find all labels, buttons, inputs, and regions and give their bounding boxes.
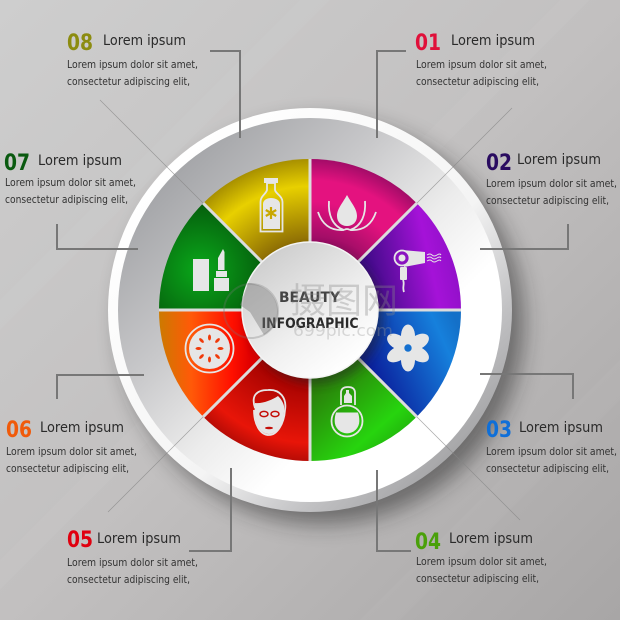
callout 02 <box>486 151 617 207</box>
watermark <box>224 273 398 340</box>
center circle <box>242 242 384 384</box>
callout 05: Lorem ipsum <box>97 531 181 547</box>
donut segments <box>159 159 461 461</box>
watermark: 摄图网 <box>290 273 398 324</box>
callout 08 <box>67 31 198 88</box>
diagonal guide lines <box>100 100 520 520</box>
callout 01: Lorem ipsum dolor sit amet, <box>416 58 547 71</box>
callout 07: 07 <box>4 151 30 176</box>
segment 03 blue <box>310 310 461 417</box>
icon: bottle <box>260 178 282 232</box>
connector 01 <box>377 51 406 138</box>
icon: face mask <box>254 390 285 435</box>
segment 08 yellow <box>203 159 310 310</box>
wheel base <box>108 108 524 524</box>
connector 04 <box>377 470 411 551</box>
callout 06: 06 <box>6 418 32 443</box>
callout 06 <box>6 418 137 475</box>
title: INFOGRAPHIC <box>262 316 358 332</box>
callout 07: Lorem ipsum dolor sit amet, <box>5 176 136 189</box>
callout 07: consectetur adipiscing elit, <box>5 193 128 206</box>
callout 08: 08 <box>67 31 93 56</box>
callout 04 <box>415 530 547 585</box>
callout 05: 05 <box>67 528 93 553</box>
segment 05 red <box>203 310 310 461</box>
segment 07 dark green <box>159 203 310 310</box>
icon: flower <box>384 324 432 372</box>
callout 03: Lorem ipsum <box>519 420 603 436</box>
callout 04: 04 <box>415 530 441 555</box>
callout 02: Lorem ipsum <box>517 152 601 168</box>
callout 04: Lorem ipsum dolor sit amet, <box>416 555 547 568</box>
callout 01: consectetur adipiscing elit, <box>416 75 539 88</box>
callout 01: Lorem ipsum <box>451 33 535 49</box>
title: BEAUTY <box>279 290 340 306</box>
connector 06 <box>57 375 144 399</box>
connector 03 <box>480 374 573 399</box>
callout 08: Lorem ipsum <box>103 33 186 49</box>
callout 08: consectetur adipiscing elit, <box>67 75 190 88</box>
callout 01: 01 <box>415 31 441 56</box>
callout 05: consectetur adipiscing elit, <box>67 573 190 586</box>
callout 02: 02 <box>486 151 512 176</box>
callout 05 <box>67 528 198 586</box>
icon: cucumber slice <box>186 324 234 372</box>
callout 06: Lorem ipsum dolor sit amet, <box>6 445 137 458</box>
callout 05: Lorem ipsum dolor sit amet, <box>67 556 198 569</box>
connector 07 <box>57 224 138 249</box>
callout 01 <box>415 31 547 88</box>
callout 07 <box>4 151 136 206</box>
callout 03 <box>486 418 617 475</box>
segment 06 orange <box>159 310 310 417</box>
segment 04 green <box>310 310 417 461</box>
callout 04: consectetur adipiscing elit, <box>416 572 539 585</box>
callout 08: Lorem ipsum dolor sit amet, <box>67 58 198 71</box>
icon: lotus <box>318 195 376 230</box>
connector 05 <box>189 468 231 551</box>
callout 03: 03 <box>486 418 512 443</box>
segment 02 purple <box>310 203 461 310</box>
connector 08 <box>210 51 240 138</box>
callout 04: Lorem ipsum <box>449 531 533 547</box>
icon: hair dryer <box>394 250 441 292</box>
icon: round bottle <box>332 387 362 436</box>
watermark: 699pic.com <box>293 321 393 340</box>
connector 02 <box>480 224 568 249</box>
icon: lipstick <box>193 249 229 291</box>
segment 01 magenta <box>310 159 417 310</box>
callout 07: Lorem ipsum <box>38 153 122 169</box>
callout 06: consectetur adipiscing elit, <box>6 462 129 475</box>
callout 06: Lorem ipsum <box>40 420 124 436</box>
title <box>262 290 358 332</box>
